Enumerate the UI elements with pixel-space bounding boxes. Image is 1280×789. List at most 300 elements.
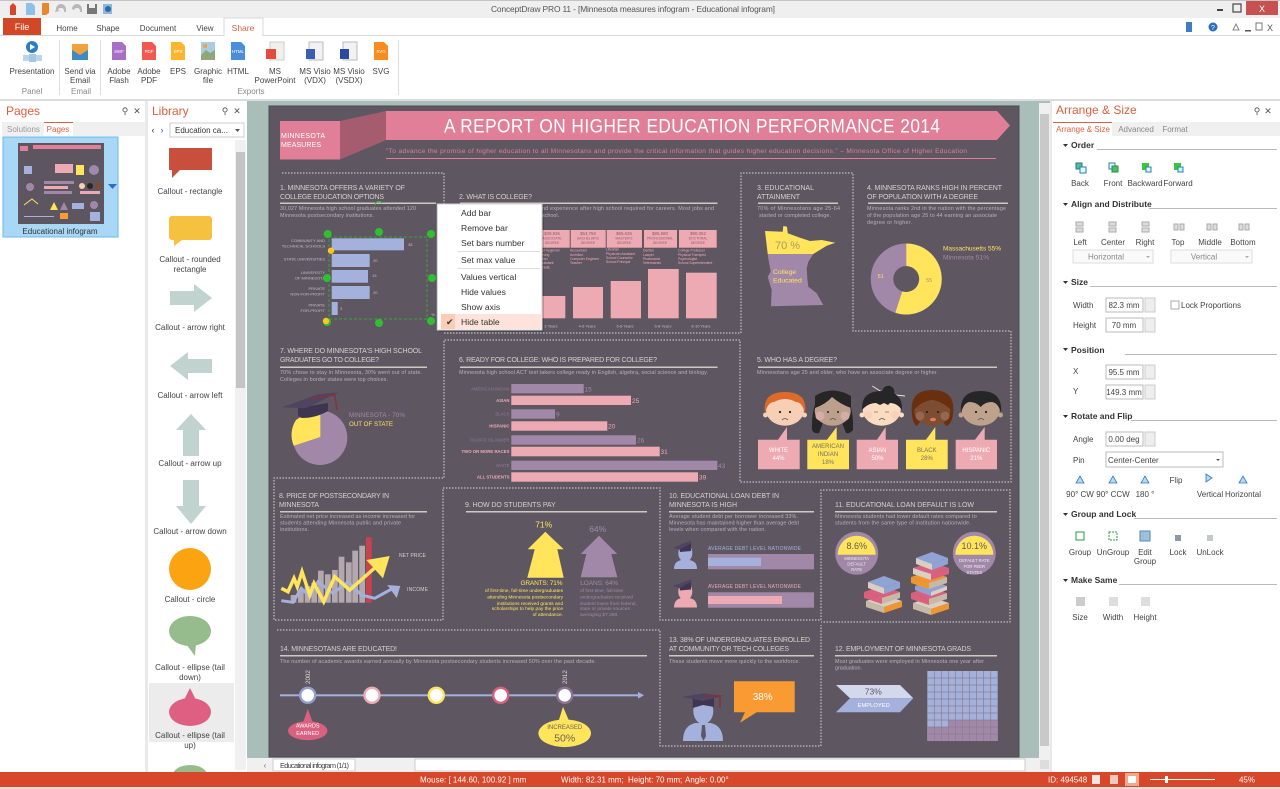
bar chart: OF MINNESOTA	[295, 276, 325, 280]
panel: 12 employment	[835, 646, 998, 741]
debt bar minnesota: AVERAGE DEBT LEVEL NATIONWIDE	[708, 584, 802, 590]
ribbon labels: Panel	[22, 87, 42, 96]
yellow grants arrow: 71%	[535, 520, 553, 530]
column chart	[535, 269, 717, 328]
bar chart: 3	[340, 306, 343, 311]
panel: 7 where graduates go: MINNESOTA - 70%	[349, 412, 405, 419]
career lists: Veterinarian	[643, 261, 661, 265]
context menu: Remove bar	[461, 223, 508, 233]
salary boxes: ASSOCIATE	[542, 236, 562, 240]
group controls: Group	[1134, 557, 1157, 566]
make same controls: Width	[1103, 613, 1123, 622]
icon: arrow up: Callout - arrow up	[158, 459, 222, 468]
quote: "To advance the promise of higher education to all Minnesotans and provide the critical information that guides higher education decisions." – Minnesota Office of Higher Education	[386, 148, 967, 155]
panel: pages: ✕	[133, 106, 141, 116]
order controls: Front	[1104, 179, 1123, 188]
icon: ellipse tail up	[155, 688, 225, 750]
career lists: Computer Engineer	[570, 257, 600, 261]
panel: 11 loan default: Minnesota students had lower default rates compared to	[835, 514, 977, 520]
icon: arrow right: Callout - arrow right	[155, 323, 226, 332]
bar chart: 38	[408, 242, 413, 247]
horizontal bar chart: HISPANIC	[489, 424, 510, 428]
horizontal bar chart: ALL STUDENTS	[477, 474, 510, 480]
horizontal bar chart: 31	[660, 449, 668, 456]
ribbon tabs: Shape	[96, 24, 120, 33]
demographic callouts: 28%	[921, 456, 933, 462]
bar chart	[282, 238, 435, 317]
group controls: Group	[1069, 548, 1092, 557]
yellow grants arrow: of first-time, full-time undergraduates	[485, 588, 564, 594]
panel: 8 price of postsecondary: 8. PRICE OF POSTSECONDARY IN	[279, 493, 389, 500]
size fields: Height	[1073, 321, 1097, 330]
icon: export file types: SWF	[114, 49, 124, 54]
line and bar illustration	[281, 537, 400, 603]
panel: 10 educational loan debt: Average student debt per borrower increased 33%.	[669, 514, 798, 520]
book stacks	[864, 552, 949, 615]
panel: 7 where graduates go: 70% chose to stay in Minnesota, 30% went out of state.	[280, 370, 422, 376]
demographic callouts: BLACK	[917, 448, 937, 454]
salary boxes: $39,936	[544, 231, 560, 236]
horizontal bar chart: PACIFIC ISLANDER	[470, 438, 510, 442]
bar chart: 20	[373, 258, 378, 263]
ribbon labels	[10, 67, 389, 96]
horizontal bar chart: ASIAN	[496, 398, 510, 403]
icon: export file types: PDF	[145, 49, 154, 54]
align controls: Vertical	[1191, 252, 1217, 262]
order controls: Forward	[1163, 179, 1193, 188]
panel: 13 undergraduates at community colleges: These students move more quickly to the workforce.	[669, 659, 800, 665]
yellow grants arrow	[485, 520, 564, 618]
timeline: 2002	[305, 670, 312, 684]
panel: 10 educational loan debt: levels when compared with the nation.	[669, 527, 766, 533]
callout: awards earned	[288, 709, 327, 740]
bar chart: %	[431, 312, 435, 317]
callout: awards earned: AWARDS	[296, 724, 320, 730]
panel: 8 price of postsecondary: NET PRICE	[399, 553, 427, 559]
panel: 1 college education options: Minnesota postsecondary institutions.	[280, 213, 374, 219]
context menu: ✔	[446, 317, 454, 327]
salary boxes	[535, 230, 717, 248]
ribbon: export commands	[0, 22, 1280, 101]
icon: callout rectangle	[158, 148, 223, 196]
panel: 2 what is college: 2. WHAT IS COLLEGE?	[459, 194, 532, 201]
bar chart: UNIVERSITY	[301, 270, 325, 275]
panel: 1 college education options	[280, 185, 436, 327]
context menu: Hide values	[461, 287, 506, 297]
icon: arrow down	[153, 480, 227, 536]
panel: pages: ⚲	[122, 106, 128, 116]
map of minnesota: 70 %	[775, 240, 800, 252]
career lists: Pharmacist	[643, 257, 660, 261]
context menu	[437, 204, 544, 332]
ribbon labels: Send via	[64, 67, 96, 76]
panel: library: Library	[152, 104, 189, 118]
ribbon labels: Adobe	[107, 67, 131, 76]
panel: 11 loan default: 11. EDUCATIONAL LOAN DEFAULT IS LOW	[835, 502, 974, 509]
map of minnesota	[765, 226, 835, 306]
ribbon labels: (VDX)	[304, 76, 326, 85]
panel: arrange and size: ✕	[1264, 106, 1272, 116]
header banner: MINNESOTA	[281, 133, 325, 140]
status bar: Height: 70 mm;	[628, 776, 682, 784]
callout: 38 percent	[734, 681, 795, 723]
ribbon labels: Email	[71, 87, 91, 96]
salary boxes: PROFESSIONAL	[647, 236, 673, 240]
demographic callouts: 50%	[871, 456, 884, 462]
horizontal bar chart: 15	[584, 386, 592, 394]
section headings: Order	[1071, 140, 1095, 150]
panel: 7 where graduates go	[280, 348, 427, 465]
panel: 8 price of postsecondary: students attending Minnesota public and private	[280, 520, 401, 526]
ribbon labels: MS Visio	[299, 67, 331, 76]
icon: ellipse tail down	[155, 616, 225, 682]
icon: graduate pink	[673, 580, 697, 608]
ribbon labels: Adobe	[137, 67, 161, 76]
career lists: School Principal	[606, 260, 631, 264]
panel: pages: Educational infogram	[22, 227, 98, 236]
career lists: College Professor	[678, 248, 706, 252]
career lists: Physician Assistant	[606, 252, 635, 256]
ribbon tabs: View	[196, 24, 214, 33]
panel: 4 percent with a degree: 4. MINNESOTA RANKS HIGH IN PERCENT	[867, 185, 1003, 192]
panel: 9 how students pay	[465, 502, 647, 618]
panel: 2 what is college	[459, 194, 718, 328]
status bar: Angle: 0.00°	[685, 776, 729, 784]
bar chart: COMMUNITY AND	[291, 238, 325, 243]
callout: awards earned: EARNED	[296, 731, 319, 737]
bar chart: PRIVATE	[308, 286, 325, 291]
horizontal bar chart: 39	[699, 474, 707, 482]
panel: 3 educational attainment: ATTAINMENT	[757, 194, 801, 201]
bar chart: TECHNICAL SCHOOLS	[282, 244, 325, 248]
career lists: School Superintendent	[678, 261, 712, 265]
icon: circle: Callout - circle	[165, 595, 216, 604]
purple loans arrow: 64%	[589, 524, 607, 534]
panel: 4 percent with a degree: degree or higher.	[867, 220, 912, 226]
panel: 1 college education options: 30,027 Minnesota high school graduates attended 120	[280, 206, 416, 212]
panel: pages	[0, 101, 148, 772]
column chart: 4-6 Years	[579, 324, 595, 328]
icon: export file types: SVG	[376, 49, 386, 54]
panel: 3 educational attainment: 3. EDUCATIONAL	[757, 185, 814, 192]
donut chart	[878, 244, 942, 314]
canvas scrollbars: Educational infogram (1/1)	[280, 761, 349, 770]
panel: 7 where graduates go: GRADUATES GO TO COLLEGE?	[280, 357, 379, 364]
position fields: 95.5 mm	[1108, 368, 1140, 377]
purple loans arrow: undergraduates received	[580, 594, 633, 600]
align controls: Left	[1073, 238, 1087, 247]
career lists: Accountant	[570, 248, 587, 252]
callout: 38 percent: 38%	[753, 692, 773, 703]
rotate fields: 0.00 deg	[1108, 435, 1140, 444]
career lists: Dentist	[643, 248, 654, 252]
panel: pages: Solutions	[7, 125, 40, 134]
panel: library: ‹	[152, 125, 154, 135]
panel: library: Education ca...	[175, 126, 228, 135]
demographic callouts: ASIAN	[868, 448, 887, 454]
purple loans arrow: of first-time, full-time	[580, 588, 624, 594]
size fields: Width	[1073, 301, 1093, 310]
yellow grants arrow: institutions received grants and	[497, 601, 563, 607]
icon: presentation	[23, 41, 42, 62]
title bar	[0, 0, 1280, 18]
title bar: X	[1259, 4, 1265, 14]
panel: pages: Pages	[47, 125, 69, 134]
dotted panel borders	[274, 173, 1011, 746]
demographic callouts: AMERICAN	[812, 444, 844, 450]
bar chart: STATE UNIVERSITIES	[284, 256, 325, 262]
bar chart: 19	[372, 273, 377, 278]
salary boxes: DEGREE	[653, 241, 668, 245]
chevron: 73 percent employed: 73%	[865, 686, 882, 696]
map of minnesota: College	[773, 269, 796, 276]
order controls	[1071, 163, 1193, 188]
yellow grants arrow: scholarships to help pay the price	[492, 606, 563, 612]
bar chart: 20	[373, 290, 378, 295]
ribbon right controls	[1186, 22, 1273, 33]
ribbon labels: HTML	[227, 67, 249, 76]
demographic callouts: 21%	[970, 456, 983, 462]
career lists: rsing	[542, 253, 549, 257]
callout: increased 50 percent	[538, 707, 591, 747]
chevron: 73 percent employed: EMPLOYED	[858, 703, 890, 709]
ribbon labels: EPS	[170, 67, 186, 76]
icon: ellipse tail up: up)	[184, 741, 196, 750]
page thumbnail	[3, 137, 118, 237]
status bar: 45%	[1239, 776, 1255, 784]
panel: 4 percent with a degree: Massachusetts 55%	[943, 246, 1001, 252]
size fields: 82.3 mm	[1108, 301, 1140, 310]
ribbon tabs	[0, 18, 1280, 36]
size fields: 70 mm	[1112, 321, 1137, 330]
rotate fields: Flip	[1170, 476, 1183, 485]
status bar: ID: 494548	[1048, 776, 1088, 784]
position fields: Y	[1073, 387, 1079, 396]
icon: arrow left: Callout - arrow left	[158, 391, 223, 400]
section headings: Rotate and Flip	[1071, 411, 1132, 421]
icon: callout rounded rectangle	[159, 216, 221, 274]
debt bar minnesota	[708, 584, 814, 608]
icon: ellipse tail down: down)	[179, 673, 201, 682]
status bar: Width: 82.31 mm;	[561, 776, 624, 784]
size fields	[1073, 298, 1241, 332]
panel: 3 educational attainment: 70% of Minnesotans age 25-64	[757, 206, 840, 212]
position fields: 149.3 mm	[1106, 388, 1142, 397]
badge: peer default rate: STATES	[966, 570, 982, 575]
rotate fields	[1066, 432, 1261, 499]
icon: graduate	[682, 693, 724, 741]
panel: 6 ready for college: 6. READY FOR COLLEGE: WHO IS PREPARED FOR COLLEGE?	[459, 357, 657, 364]
icon: export file types	[112, 42, 388, 60]
ribbon labels: MS Visio	[333, 67, 365, 76]
group controls: UnLock	[1196, 548, 1225, 557]
salary boxes: DOCTORAL	[689, 236, 708, 240]
waffle chart	[927, 671, 998, 741]
title: A REPORT ON HIGHER EDUCATION PERFORMANCE 2014	[444, 115, 940, 137]
context menu: Add bar	[461, 208, 491, 218]
panel: 13 undergraduates at community colleges: AT COMMUNITY OR TECH COLLEGES	[669, 646, 789, 653]
panel: 12 employment: Most graduates were employed in Minnesota one year after	[835, 659, 984, 665]
icon: arrow left	[158, 352, 223, 400]
donut chart: 51	[878, 274, 884, 280]
horizontal bar chart: 20	[608, 424, 616, 430]
career lists: tion	[542, 257, 548, 261]
ribbon labels: Email	[70, 76, 90, 85]
debt bar nationwide	[708, 546, 814, 569]
column chart: 6-8 Years	[617, 324, 633, 328]
column chart: 6-8 Years	[655, 324, 671, 328]
salary boxes: DEGREE	[581, 241, 596, 245]
career lists: Architect	[570, 253, 583, 257]
make same controls	[1072, 597, 1157, 622]
horizontal bar chart: BLACK	[495, 412, 510, 416]
badge: minnesota default rate: 8.6%	[846, 541, 867, 551]
salary boxes: DEGREE	[617, 241, 632, 245]
infographic page	[269, 106, 1019, 757]
demographic callouts: 18%	[822, 460, 835, 466]
badge: minnesota default rate: DEFAULT	[847, 562, 866, 566]
icon: email	[72, 44, 88, 60]
panel: arrange and size	[1050, 101, 1280, 772]
rotate fields: Center-Center	[1108, 456, 1159, 465]
panel: arrange and size: Arrange & Size	[1056, 103, 1137, 117]
column chart: 8-10 Years	[691, 324, 711, 328]
icon: callout rectangle: Callout - rectangle	[158, 187, 223, 196]
panel: 2 what is college: school.	[542, 213, 559, 219]
salary boxes: $54,756	[580, 231, 596, 236]
career lists: al Hygienist	[542, 248, 560, 252]
yellow grants arrow: of attendance.	[533, 612, 563, 618]
salary boxes: BACHELOR'S	[577, 236, 600, 240]
demographic callouts	[758, 427, 997, 469]
canvas scrollbars: ‹	[264, 761, 267, 770]
make same controls: Size	[1072, 613, 1088, 622]
icon: export file types: EPS	[174, 49, 182, 54]
panel: 10 educational loan debt: MINNESOTA IS HIGH	[669, 502, 737, 509]
panel: arrange and size: Format	[1162, 125, 1188, 134]
panel: 4 percent with a degree	[867, 185, 1008, 314]
panel: 5 who has a degree: 5. WHO HAS A DEGREE?	[757, 357, 837, 364]
align controls: Top	[1172, 238, 1185, 247]
purple loans arrow: state or private sources	[580, 606, 630, 612]
career lists: Psychologist	[678, 257, 697, 261]
badge: peer default rate: FOR PEER	[964, 564, 985, 569]
demographic callouts: HISPANIC	[962, 448, 991, 454]
group controls: Edit	[1138, 548, 1153, 557]
purple loans arrow: student loans from federal,	[580, 601, 637, 607]
rotate fields: Pin	[1073, 456, 1085, 465]
align controls: Right	[1136, 238, 1155, 247]
panel: 10 educational loan debt: 10. EDUCATIONAL LOAN DEBT IN	[669, 493, 779, 500]
status bar: Mouse: [ 144.60, 100.92 ] mm	[420, 776, 527, 784]
ribbon right controls: X	[1267, 23, 1273, 33]
horizontal bar chart: 9	[556, 412, 560, 418]
face: white	[763, 392, 807, 426]
rotate fields: Vertical	[1197, 490, 1223, 499]
panel: 6 ready for college: Minnesota high school ACT test takers college ready in English, algebra, social science and biology.	[459, 370, 708, 376]
section headings: Size	[1071, 277, 1088, 287]
ribbon labels: MS	[269, 67, 281, 76]
panel: 14 minnesotans are educated	[280, 646, 647, 747]
horizontal bar chart: AMERICAN INDIAN	[471, 386, 510, 392]
group controls: Lock	[1170, 548, 1187, 557]
panel: 12 employment: graduation.	[835, 666, 862, 672]
demographic callouts: WHITE	[769, 448, 788, 454]
section headings: Make Same	[1071, 575, 1118, 585]
purple loans arrow: averaging $7,388.	[580, 612, 618, 618]
column chart: 2 Years	[544, 324, 558, 328]
panel: arrange and size: Advanced	[1118, 125, 1154, 134]
horizontal bar chart: TWO OR MORE RACES	[462, 449, 510, 454]
yellow grants arrow: GRANTS: 71%	[520, 580, 563, 587]
timeline: 2012	[562, 670, 569, 684]
salary boxes: MASTER'S	[615, 236, 633, 240]
icon: arrow up	[158, 414, 222, 468]
ribbon right controls: ?	[1211, 25, 1215, 32]
panel: library: ✕	[233, 106, 241, 116]
panel: 5 who has a degree: Minnesotans age 25 and older, who have an associate degree or higher.	[757, 370, 938, 376]
icon: ellipse tail up: Callout - ellipse (tail	[155, 731, 225, 740]
panel: 11 loan default	[835, 502, 997, 615]
panel: 14 minnesotans are educated: 14. MINNESOTANS ARE EDUCATED!	[280, 646, 397, 653]
panel: 8 price of postsecondary: INCOME	[407, 587, 429, 593]
career lists: Lawyer	[643, 253, 655, 257]
panel: arrange and size: Arrange & Size	[1056, 125, 1110, 134]
bar chart: PRIVATE	[308, 302, 325, 308]
panel: 8 price of postsecondary: institutions.	[280, 527, 309, 533]
demographic callouts: 44%	[772, 456, 785, 462]
horizontal bar chart: 25	[632, 398, 640, 405]
map of minnesota: Educated	[773, 278, 802, 284]
icon: circle	[165, 548, 216, 604]
rotate fields: 90° CW	[1066, 490, 1094, 499]
panel: 12 employment: 12. EMPLOYMENT OF MINNESOTA GRADS	[835, 646, 971, 653]
panel: 5 who has a degree	[757, 357, 1003, 469]
career lists: School Counselor	[606, 256, 634, 260]
ribbon tabs: File	[15, 22, 29, 32]
ribbon tabs: Document	[140, 24, 177, 33]
rotate fields: 90° CCW	[1096, 490, 1130, 499]
salary boxes: $90,052	[690, 231, 706, 236]
ribbon labels: (VSDX)	[335, 76, 363, 85]
panel: 4 percent with a degree: of the population age 25 to 44 earning an associate	[867, 213, 997, 219]
header banner: MEASURES	[281, 142, 321, 149]
career lists: Teacher	[570, 261, 583, 265]
salary boxes: DEGREE	[545, 241, 560, 245]
panel: 13 undergraduates at community colleges	[669, 637, 814, 741]
yellow grants arrow: attending Minnesota postsecondary	[487, 594, 564, 600]
panel: 3 educational attainment: started or completed college.	[759, 213, 831, 219]
face: black	[912, 390, 953, 426]
ribbon labels: Presentation	[10, 67, 54, 76]
debt bar nationwide: AVERAGE DEBT LEVEL NATIONWIDE	[708, 546, 802, 552]
badge: minnesota default rate: RATE	[851, 567, 862, 572]
ribbon labels: PowerPoint	[255, 76, 296, 85]
panel: 8 price of postsecondary	[279, 493, 429, 603]
pie chart with cap	[282, 392, 347, 465]
career lists: Librarian	[606, 248, 619, 252]
badge: minnesota default rate	[835, 532, 878, 575]
context menu: Values vertical	[461, 272, 516, 282]
panel: 3 educational attainment	[757, 185, 840, 306]
align controls	[1073, 222, 1256, 263]
horizontal bar chart: WHITE	[496, 463, 510, 468]
size fields: Lock Proportions	[1181, 301, 1241, 310]
panel: 7 where graduates go: OUT OF STATE	[349, 421, 393, 428]
panel: 2 what is college: nd experience after high school required for careers. Most jobs and	[542, 206, 714, 212]
position fields	[1073, 365, 1155, 399]
badge: peer default rate: 10.1%	[962, 541, 987, 551]
